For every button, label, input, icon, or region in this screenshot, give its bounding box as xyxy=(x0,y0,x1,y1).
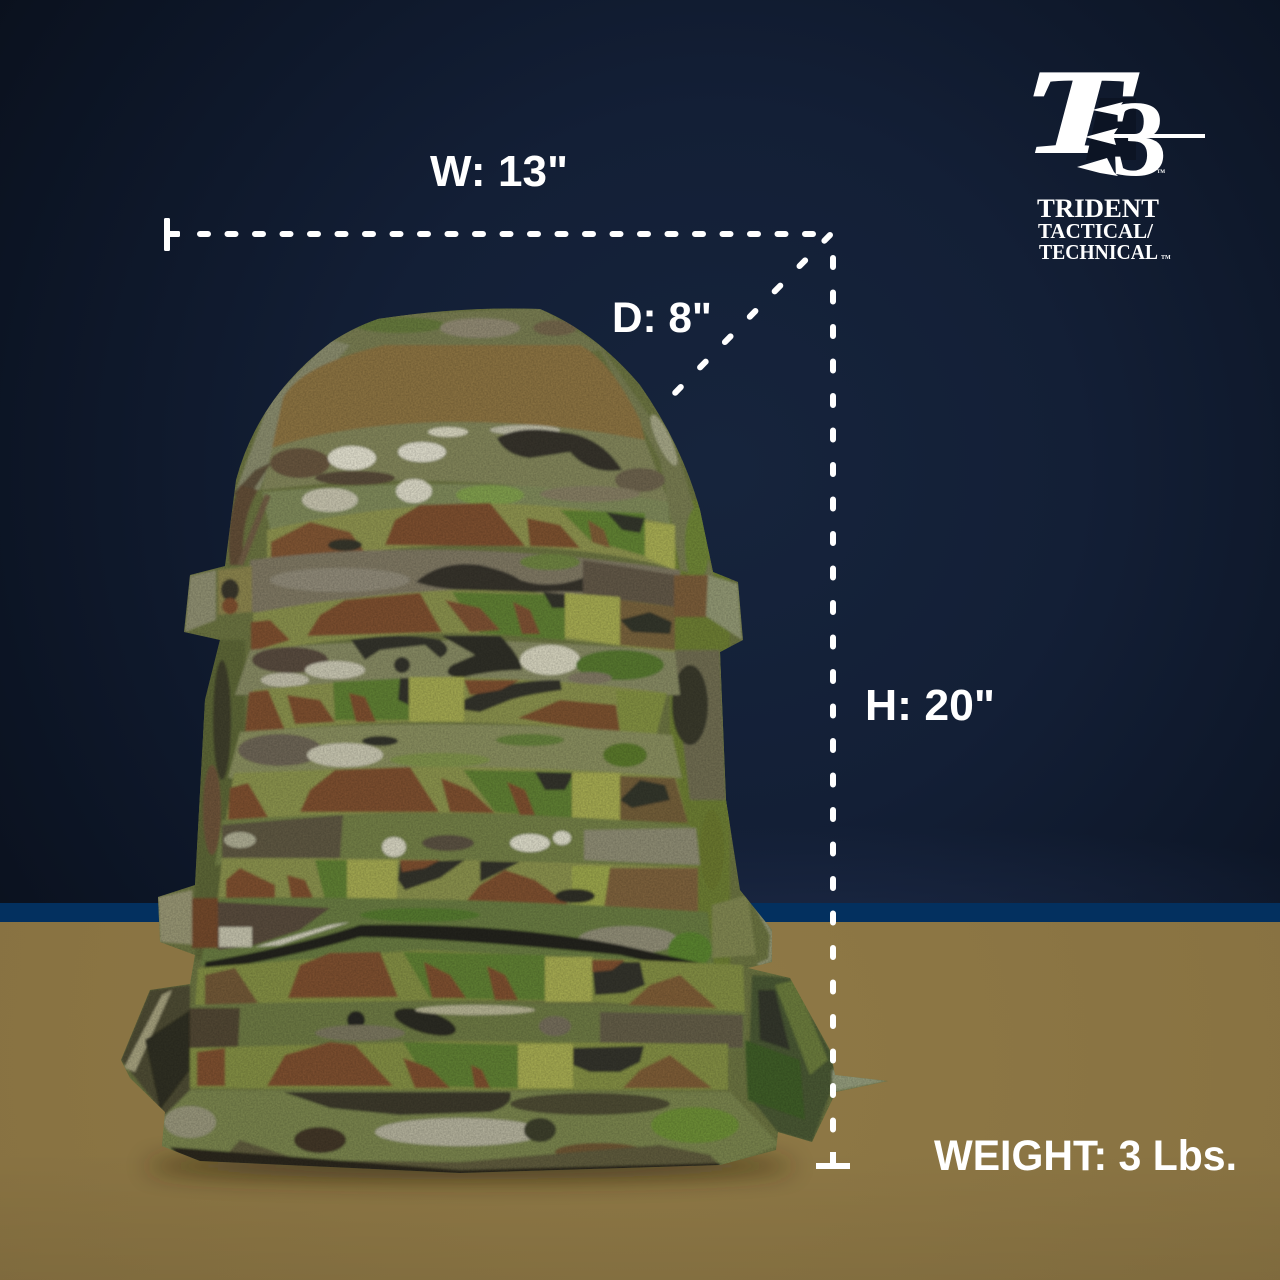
fabric grain xyxy=(110,300,900,1180)
velcro patch xyxy=(272,345,645,448)
logo mark: T xyxy=(1022,45,1139,178)
logo wordmark: TECHNICAL xyxy=(1039,240,1158,264)
depth measurement line xyxy=(672,235,830,396)
webbing row 6 xyxy=(195,950,745,1012)
blue horizon band xyxy=(0,903,1280,923)
logo mark: 3 xyxy=(1111,80,1167,199)
backpack ground shadow xyxy=(145,1153,795,1179)
bottom panel xyxy=(160,1090,780,1178)
height label: H: 20" xyxy=(865,681,995,730)
lower buckles xyxy=(158,890,772,965)
width label: W: 13" xyxy=(430,147,568,196)
backpack illustration xyxy=(110,300,900,1180)
webbing row 2 xyxy=(251,590,675,655)
gap 5 xyxy=(185,1002,745,1050)
webbing row 7 xyxy=(165,1041,728,1090)
logo wordmark: TACTICAL/ xyxy=(1038,219,1154,243)
right side pouch and tab xyxy=(745,975,888,1142)
logo wordmark xyxy=(1037,194,1171,264)
webbing row 5 xyxy=(218,858,698,912)
width measurement line xyxy=(164,218,825,251)
gap 3 xyxy=(228,724,682,778)
webbing row 4 xyxy=(226,767,688,823)
T3 Trident Tactical/Technical logo xyxy=(1022,45,1205,264)
webbing row 1 xyxy=(267,503,675,570)
logo wordmark: TRIDENT xyxy=(1037,194,1159,223)
webbing row 3 xyxy=(245,677,667,737)
depth label: D: 8" xyxy=(612,294,712,342)
left side pouch xyxy=(121,985,190,1115)
body panel under flap xyxy=(229,462,672,565)
logo wordmark: TM xyxy=(1161,255,1171,261)
tan floor xyxy=(0,922,1280,1280)
gap 4 xyxy=(215,814,700,865)
logo mark xyxy=(1022,45,1205,199)
buckles and side straps upper xyxy=(185,566,742,640)
background: dark navy wall xyxy=(0,0,1280,905)
side panels xyxy=(195,308,730,980)
upper flap xyxy=(262,422,668,505)
gap 2 xyxy=(235,636,680,695)
gap 1 xyxy=(250,550,682,612)
weight label: WEIGHT: 3 Lbs. xyxy=(934,1132,1237,1180)
lower mid panel xyxy=(200,898,715,975)
logo mark: TM xyxy=(1157,170,1165,175)
height measurement line xyxy=(816,243,850,1169)
